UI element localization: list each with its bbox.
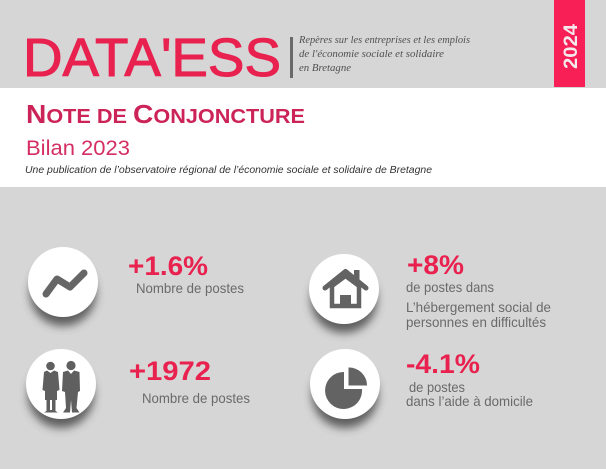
- icon: trend line: [28, 247, 98, 326]
- year tab: 2024: [561, 24, 582, 69]
- label: Nombre de postes: [142, 390, 250, 406]
- labels: dans l’aide à domicile: [406, 393, 533, 409]
- tagline: [298, 34, 470, 74]
- labels: de postes: [409, 379, 465, 395]
- heading: note de conjoncture: NOTE DE CONJONCTURE: [26, 99, 305, 129]
- labels: L’hébergement social de: [406, 299, 551, 315]
- labels: de postes dans: [406, 279, 494, 295]
- logo title: DATA'ESS: [23, 28, 281, 88]
- tagline: Repères sur les entreprises et les emplois: [298, 34, 470, 46]
- logo divider: [290, 37, 293, 78]
- value: +1.6%: [128, 251, 208, 281]
- icon: pie chart: [310, 349, 380, 428]
- panel: white title band: [0, 88, 606, 187]
- value: +1972: [129, 356, 211, 386]
- tagline: en Bretagne: [299, 62, 351, 74]
- year tab: [554, 0, 585, 87]
- value: -4.1%: [406, 349, 480, 379]
- subheading: bilan 2023: Bilan 2023: [26, 137, 130, 160]
- icon: house: [309, 254, 379, 333]
- labels: personnes en difficultés: [406, 314, 546, 330]
- publication line: Une publication de l’observatoire régional de l’économie sociale et solidaire de Bretagne: [25, 165, 432, 176]
- label: Nombre de postes: [136, 280, 244, 296]
- stat: +8%: [309, 250, 551, 333]
- tagline: de l'économie sociale et solidaire: [299, 48, 444, 60]
- value: +8%: [407, 250, 464, 280]
- stat: +1972: [26, 349, 250, 428]
- labels: [406, 279, 551, 330]
- stat: +1.6%: [28, 247, 244, 326]
- labels: [406, 379, 533, 409]
- stat: -4.1%: [310, 349, 533, 428]
- icon: two people: [26, 349, 96, 428]
